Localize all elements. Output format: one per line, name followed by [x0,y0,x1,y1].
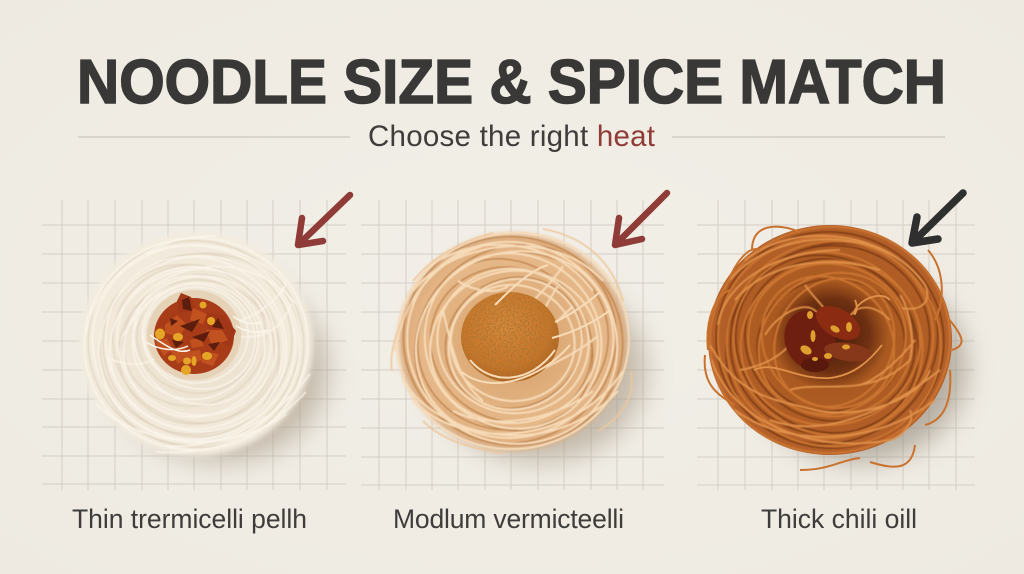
arrow: red [615,193,667,245]
arrow: red [298,195,350,245]
label: thin vermicelli: Thin trermicelli pellh [72,504,307,534]
chili flakes [147,290,241,380]
chili pieces in oil [776,299,873,377]
panel: medium vermicelli [361,193,667,490]
arrow: dark [912,193,963,243]
noodle nest: thick orange [691,206,973,481]
noodle nest: medium tan [374,204,657,484]
loose strands [705,227,962,470]
panel: thin vermicelli [42,195,350,490]
panel: thick chili oil [691,193,975,490]
title: NOODLE SIZE & SPICE MATCH [77,48,946,117]
subtitle: Choose the right heat [368,120,655,153]
chili powder mound [461,292,559,382]
label: medium vermicelli: Modlum vermicteelli [393,504,624,534]
noodle nest: thin white [64,217,334,482]
label: thick chili oil: Thick chili oill [761,504,917,534]
